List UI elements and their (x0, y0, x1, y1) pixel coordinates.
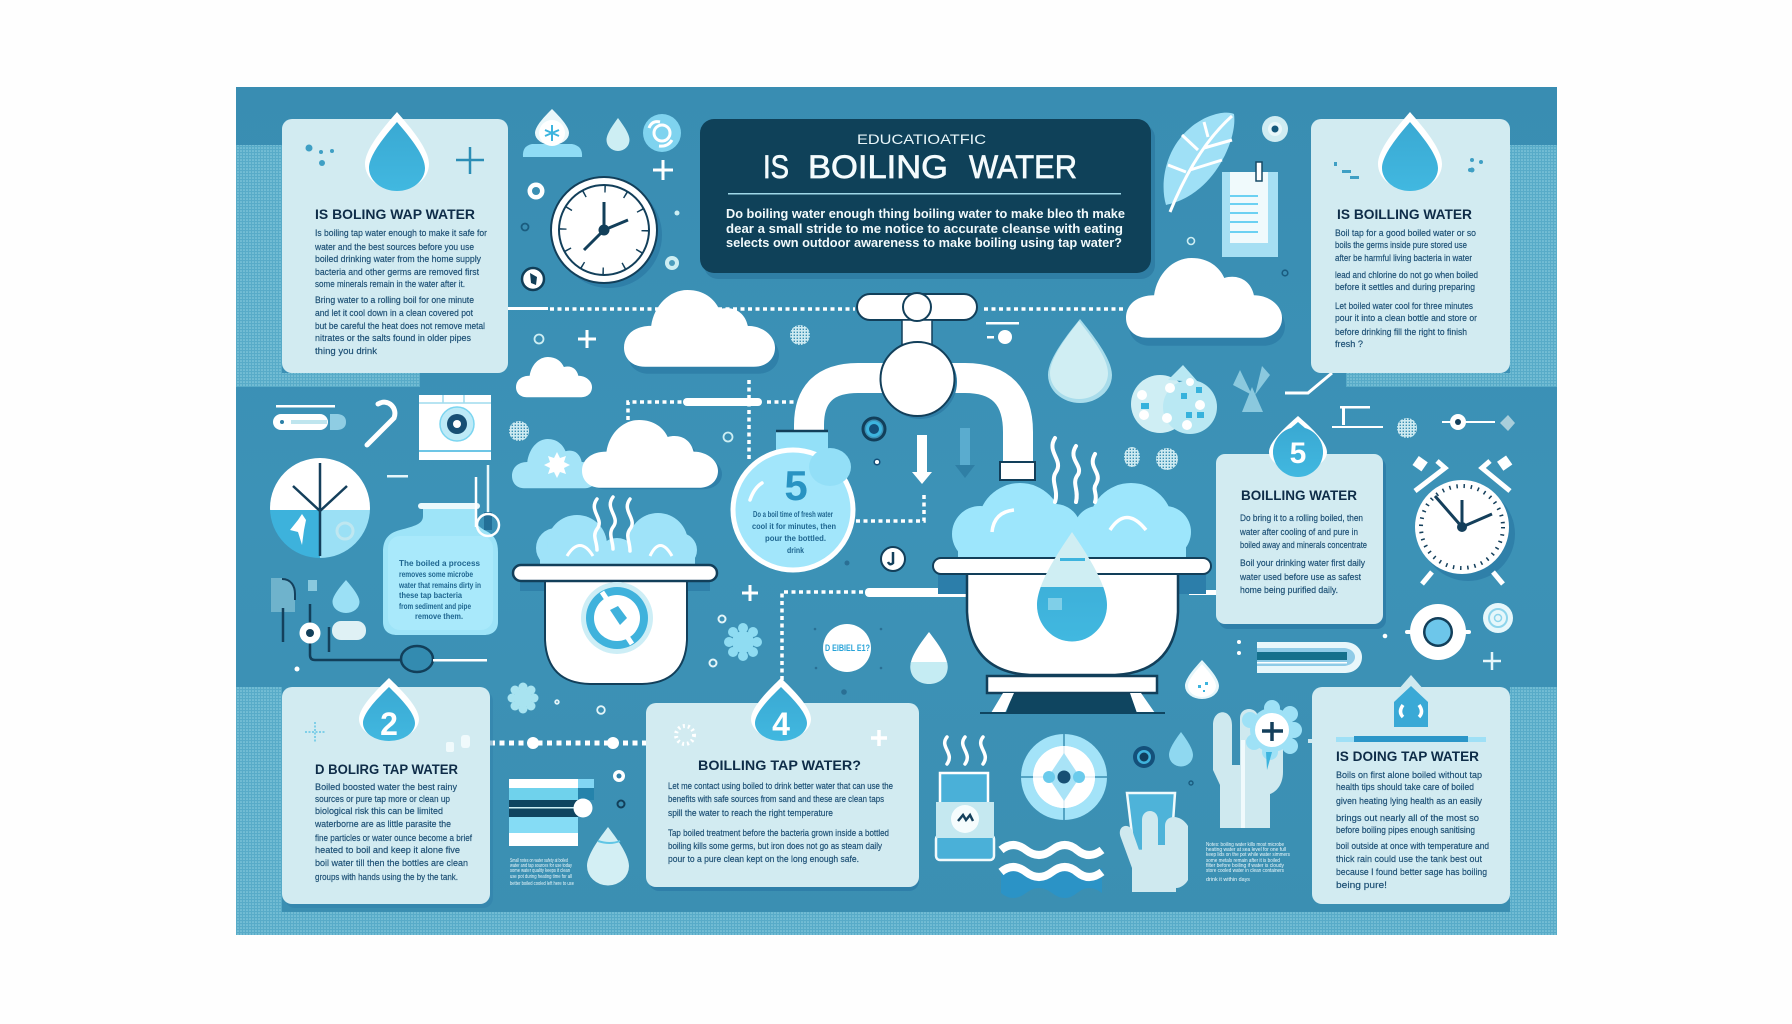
icon: half-filled drop (910, 632, 948, 684)
text block: boils the germs inside pure stored use (1335, 240, 1467, 251)
text block: water used before use as safest (1239, 572, 1361, 583)
arrow: blue down (955, 428, 975, 478)
icon: plus (578, 330, 596, 348)
tiny text block: some metals remain after it is boiled (1206, 858, 1280, 864)
icon: steam (945, 737, 985, 764)
icon: hand with glass (1120, 793, 1188, 892)
icon: water drop (1378, 112, 1442, 191)
text block: pour it into a clean bottle and store or (1335, 313, 1477, 324)
text block: bacteria and other germs are removed first (315, 267, 479, 278)
heading: BOILLING TAP WATER? (698, 758, 861, 773)
small rings (710, 616, 726, 666)
jar text: The boiled a process (399, 559, 481, 568)
icon: slider ring (1442, 414, 1515, 431)
panel: card five (1216, 416, 1386, 629)
title: WATER (969, 149, 1077, 185)
small rings (613, 770, 625, 808)
icon: wall clock (551, 177, 662, 288)
jar text: remove them. (415, 612, 463, 621)
icon: speckled drop (1131, 365, 1217, 434)
text block: Boil your drinking water first daily (1240, 558, 1365, 569)
eyebrow: EDUCATIOATFIC (857, 131, 986, 147)
textured circle (790, 325, 810, 345)
tiny text block: keep lids on the pot while water simmers (1206, 852, 1290, 858)
text block: health tips should take care of boiled (1336, 782, 1474, 793)
jar text: from sediment and pipe (399, 602, 471, 611)
tiny text block: filter before boiling if water is cloudy (1206, 863, 1284, 869)
text block: boil water till then the bottles are clean (315, 858, 468, 869)
text block: being pure! (1336, 880, 1387, 891)
jar text: water that remains dirty in (398, 581, 481, 590)
text block: sources or pure tap more or clean up (315, 794, 450, 805)
chart: pie (270, 458, 370, 560)
text block: Boils on first alone boiled without tap (1336, 770, 1482, 781)
background panel (236, 87, 1557, 935)
pipe (809, 378, 1018, 465)
faucet (809, 293, 1035, 480)
icon: swirl circle (643, 114, 681, 152)
small devices: left (273, 405, 346, 430)
title: IS (763, 149, 789, 185)
text block: spill the water to reach the right temperature (668, 808, 833, 819)
flask with number 5 (733, 431, 853, 570)
icon: droplet on cloud (523, 109, 582, 157)
text block: lead and chlorine do not go when boiled (1335, 270, 1478, 281)
text block (1335, 228, 1478, 350)
subtitle: Do boiling water enough thing boiling water to make bleo th make (726, 206, 1125, 221)
icon: gear (863, 418, 885, 440)
water drop (1037, 532, 1107, 642)
body (880, 342, 957, 419)
icon: white specked drop (1185, 660, 1219, 699)
text block: and let it cool down in a clean covered pot (315, 308, 473, 319)
icon: house drop (1394, 675, 1428, 727)
icon: capsule gauge (1257, 642, 1362, 673)
heading bar (1336, 736, 1486, 742)
number drop: 4 (772, 706, 790, 742)
text block: but be careful the heat does not remove metal (315, 321, 485, 332)
dark dots (814, 560, 882, 695)
text block: given heating lying health as an easily (1336, 796, 1482, 807)
subtitle: selects own outdoor awareness to make boiling using tap water? (726, 235, 1122, 250)
tiny text block: water and tap sources for use today (510, 863, 572, 869)
jar text: these tap bacteria (399, 591, 463, 600)
panel: bottom left card (282, 678, 493, 908)
text block: Do bring it to a rolling boiled, then (1240, 513, 1363, 524)
icon: waves (1001, 845, 1102, 898)
text block (1336, 770, 1489, 891)
handle (857, 293, 977, 350)
subtitle: dear a small stride to me notice to accurate cleanse with eating (726, 221, 1123, 236)
text block: water and the best sources before you use (314, 242, 474, 253)
small ring (874, 459, 880, 465)
panel: top left card (282, 112, 508, 373)
icon: feather (1164, 113, 1234, 212)
icon: pale drop (606, 118, 630, 151)
heading: IS BOILLING WATER (1337, 207, 1472, 222)
text block: home being purified daily. (1240, 585, 1338, 596)
tiny text block: drink it within days (1206, 877, 1251, 883)
cloud: small left (516, 357, 592, 397)
text block: Boiled boosted water the best rainy (315, 782, 457, 793)
text block: before drinking fill the right to finish (1335, 327, 1467, 338)
text block: benefits with safe sources from sand and these are clean taps (668, 794, 884, 805)
decorative dots (306, 144, 334, 166)
icon: slider (986, 322, 1019, 344)
tiny text block: some water quality keeps it clean (510, 868, 570, 874)
flask text: Do a boil time of fresh water (753, 510, 833, 519)
small rings (555, 700, 605, 714)
text block: Let me contact using boiled to drink better water that can use the (668, 781, 893, 792)
text block: Bring water to a rolling boil for one minute (315, 295, 474, 306)
decorative marks (1334, 158, 1483, 179)
icon: plus (1483, 652, 1501, 670)
chart: stripes (509, 779, 594, 846)
heading: D BOLIRG TAP WATER (315, 762, 458, 777)
title (763, 149, 1077, 185)
icon: plus (653, 160, 673, 180)
pot body (545, 578, 687, 684)
steam (594, 497, 632, 551)
jar text: removes some microbe (399, 570, 473, 579)
sparkle (305, 722, 325, 743)
title banner (700, 119, 1155, 279)
icon: plus (871, 730, 887, 746)
small ring (1189, 781, 1193, 785)
icon: alarm clock (1412, 455, 1515, 584)
icon: gear (1133, 746, 1155, 768)
small blocks (446, 735, 470, 752)
icon: hanging hook (476, 465, 499, 536)
tiny text block: Small notes on water safety at boiled (510, 858, 568, 864)
text block: before it settles and during preparing (1335, 282, 1475, 293)
small rings (1188, 238, 1288, 276)
number drop (751, 678, 811, 742)
clouds: steam pair (512, 420, 722, 489)
nozzle (1000, 462, 1035, 480)
arrow: white down (912, 435, 932, 484)
number drop: 5 (1290, 437, 1306, 470)
dial (581, 582, 653, 654)
number drop: 2 (380, 706, 398, 742)
text block: brings out nearly all of the most so (1336, 813, 1479, 824)
jar text (398, 559, 481, 621)
text block: after be harmful living bacteria in water (1335, 253, 1472, 264)
text block: boiled drinking water from the home supply (315, 254, 481, 265)
icon: flower (508, 682, 538, 714)
icon: swirl badge (1483, 603, 1513, 633)
foam (536, 513, 697, 578)
textured circle (509, 421, 529, 441)
connector lines (490, 307, 1332, 749)
flask number: 5 (784, 462, 808, 509)
text block: Tap boiled treatment before the bacteria grown inside a bottled (668, 828, 889, 839)
heading: BOILLING WATER (1241, 488, 1357, 503)
text block (668, 781, 893, 865)
icon: small gauge (522, 268, 544, 290)
icon: gauge badge (1405, 604, 1471, 660)
text block: Boil tap for a good boiled water or so (1335, 228, 1476, 239)
cloud: upper centre (624, 290, 779, 374)
icon: mug (936, 773, 994, 860)
text block (1239, 513, 1367, 596)
text block: because I found better sage has boiling (1336, 867, 1487, 878)
icon: washing machine (419, 395, 491, 460)
text block (314, 782, 472, 883)
text block: pour to a pure clean kept on the long enough safe. (668, 854, 859, 865)
text block: groups with hands using the by the tank. (315, 872, 458, 883)
text block: biological risk this can be limited (315, 806, 443, 817)
icon: pale drop (587, 827, 629, 886)
icon: compass (1021, 734, 1107, 820)
text block: thing you drink (315, 346, 377, 357)
panel: top right card (1311, 112, 1510, 373)
flask text: drink (787, 546, 804, 555)
icon: target ring (1262, 116, 1288, 142)
tiny text block: heating water at sea level for one full (1206, 847, 1286, 853)
icon: drop (1169, 732, 1193, 766)
pot body (967, 572, 1178, 675)
text block: heated to boil and keep it alone five (315, 845, 460, 856)
icon: T bar (1332, 406, 1383, 428)
text block: some minerals remain in the water after it. (315, 279, 465, 290)
text block: nitrates or the salts found in older pipes (315, 333, 471, 344)
icon: small timer (881, 547, 905, 571)
sparkle (676, 726, 694, 744)
tiny text block (1206, 842, 1290, 883)
icon: water drop (365, 112, 429, 191)
tiny text block: use pot during heating time for all (510, 874, 572, 880)
text block: waterborne are as little parasite the (314, 819, 451, 830)
text block: fresh ? (1335, 339, 1363, 350)
white label badge: D EIBIEL E1? (825, 643, 870, 653)
small pot (513, 497, 717, 684)
text block (314, 228, 487, 357)
title: BOILING (808, 149, 948, 185)
text block: fine particles or water ounce become a brief (315, 833, 472, 844)
icon: pale drop (1048, 319, 1112, 403)
text block: thick rain could use the tank best out (1336, 854, 1482, 865)
text block: before boiling pipes enough sanitising (1336, 825, 1475, 836)
panel: bottom right card (1312, 675, 1510, 904)
flask text: pour the bottled. (765, 534, 826, 543)
textured circles (1124, 447, 1178, 470)
small rings (522, 182, 680, 344)
base (980, 676, 1165, 713)
number drop (359, 678, 419, 742)
lab bits: lower left (271, 578, 487, 672)
icon: raised hand with flower (1213, 700, 1302, 828)
tiny text block (510, 858, 574, 887)
flask text: cool it for minutes, then (752, 522, 836, 531)
text block: water after cooling of and pure in (1239, 527, 1358, 538)
tiny text block: better boiled cooled left here to use (510, 881, 574, 887)
icon: spiral (724, 432, 732, 442)
heading: IS BOLING WAP WATER (315, 207, 475, 222)
text block: Let boiled water cool for three minutes (1335, 301, 1473, 312)
icon: windmill (1233, 366, 1270, 412)
cloud: right large (1126, 258, 1285, 346)
tiny text block: Notes: boiling water kills most microbe (1206, 842, 1284, 848)
white label badge (823, 624, 871, 672)
large pot (933, 438, 1211, 713)
textured circle (1397, 418, 1417, 438)
icon: notebook (1222, 162, 1278, 257)
icon: plus (456, 147, 484, 174)
steam (1052, 438, 1098, 502)
icon: hook (367, 402, 395, 445)
text block: Is boiling tap water enough to make it safe for (315, 228, 487, 239)
white dots (1237, 634, 1387, 655)
heading: IS DOING TAP WATER (1336, 749, 1479, 764)
panel: card four (646, 678, 919, 891)
jar (383, 503, 498, 635)
text block: boil outside at once with temperature and (1336, 841, 1489, 852)
flask text (752, 510, 836, 555)
icon: plus (742, 585, 758, 601)
minus mark (387, 475, 408, 478)
text block: boiling kills some germs, but iron does not go as steam daily (668, 841, 882, 852)
subtitle (726, 206, 1125, 250)
foam (952, 483, 1191, 567)
icon: flower (724, 623, 762, 661)
number drop (1269, 416, 1327, 477)
tiny text block: store cooled water in clean containers (1206, 868, 1284, 874)
text block: boiled away and minerals concentrate (1240, 540, 1367, 551)
